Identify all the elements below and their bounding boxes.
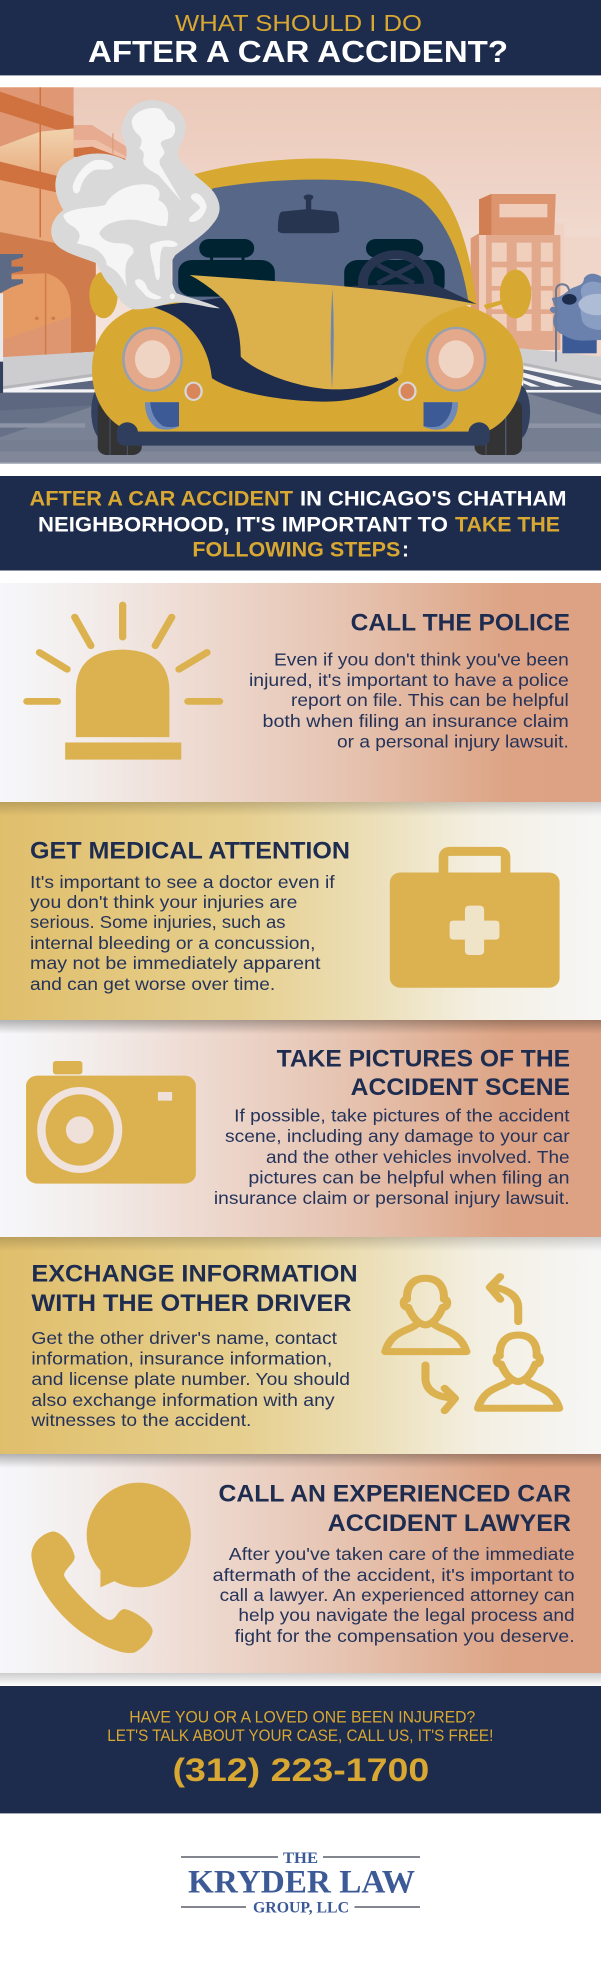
traffic light xyxy=(0,254,23,393)
body text: Get the other driver's name, contact xyxy=(31,1328,337,1348)
body text: help you navigate the legal process and xyxy=(238,1605,575,1625)
body text xyxy=(249,649,569,752)
intro banner: : xyxy=(402,538,409,561)
engine cavity xyxy=(151,297,399,402)
body text: scene, including any damage to your car xyxy=(225,1126,570,1146)
body text: internal bleeding or a concussion, xyxy=(30,933,315,953)
call to action footer: HAVE YOU OR A LOVED ONE BEEN INJURED? xyxy=(129,1707,475,1726)
icon: camera xyxy=(26,1061,196,1184)
body text: injured, it's important to have a police xyxy=(249,670,569,690)
headlights xyxy=(123,328,485,391)
body text: you don't think your injuries are xyxy=(30,892,297,912)
body text: call a lawyer. An experienced attorney can xyxy=(220,1585,575,1605)
icon: phone and speech bubble xyxy=(31,1483,191,1653)
heading: ACCIDENT LAWYER xyxy=(328,1510,571,1537)
body text: and can get worse over time. xyxy=(30,974,275,994)
body text: serious. Some injuries, such as xyxy=(30,912,286,932)
call to action footer xyxy=(0,1686,601,1814)
title banner xyxy=(0,0,601,76)
logo: the kryder law group xyxy=(181,1850,420,1917)
panel: take pictures of the accident scene xyxy=(0,1020,601,1237)
sidewalks and road xyxy=(0,348,601,464)
body text: After you've taken care of the immediate xyxy=(229,1544,575,1564)
seats xyxy=(178,239,445,297)
indicators xyxy=(186,383,415,400)
heading: CALL THE POLICE xyxy=(351,610,570,637)
mirrors xyxy=(89,270,531,318)
body text: If possible, take pictures of the accident xyxy=(234,1106,570,1126)
rear-view mirror xyxy=(278,194,339,233)
body text: or a personal injury lawsuit. xyxy=(337,732,569,752)
panel: call the police xyxy=(0,583,601,802)
body text xyxy=(213,1544,575,1646)
intro banner: FOLLOWING STEPS xyxy=(192,538,400,561)
icon: siren xyxy=(27,605,220,760)
logo: the kryder law group: KRYDER LAW xyxy=(188,1865,415,1901)
body text: Even if you don't think you've been xyxy=(274,649,569,669)
logo: the kryder law group: THE xyxy=(283,1850,318,1867)
heading: ACCIDENT SCENE xyxy=(351,1074,570,1101)
body text: may not be immediately apparent xyxy=(30,953,321,973)
body text: insurance claim or personal injury lawsuit. xyxy=(214,1188,570,1208)
body text: and license plate number. You should xyxy=(31,1369,350,1389)
body text: also exchange information with any xyxy=(31,1390,335,1410)
body text: and the other vehicles involved. The xyxy=(266,1147,570,1167)
panel: call an experienced car accident lawyer xyxy=(0,1454,601,1673)
heading xyxy=(218,1481,571,1537)
body text: witnesses to the accident. xyxy=(30,1410,251,1430)
heading: TAKE PICTURES OF THE xyxy=(277,1046,570,1073)
intro banner: IN CHICAGO'S CHATHAM xyxy=(300,488,566,511)
body text: fight for the compensation you deserve. xyxy=(235,1626,575,1646)
body text: report on file. This can be helpful xyxy=(291,690,569,710)
tree and lamp post xyxy=(550,274,601,362)
heading xyxy=(277,1046,570,1101)
open hood xyxy=(190,275,475,389)
right buildings xyxy=(471,194,601,360)
steering wheel xyxy=(363,255,429,312)
heading: GET MEDICAL ATTENTION xyxy=(30,838,350,865)
heading xyxy=(31,1261,358,1317)
body text: aftermath of the accident, it's important to xyxy=(213,1565,575,1585)
panel: get medical attention xyxy=(0,802,601,1020)
title banner: AFTER A CAR ACCIDENT? xyxy=(88,34,508,69)
body xyxy=(92,302,523,432)
left buildings xyxy=(0,87,126,357)
car xyxy=(89,158,531,455)
body text xyxy=(30,1328,350,1430)
intro banner: AFTER A CAR ACCIDENT xyxy=(30,488,293,511)
heading: CALL AN EXPERIENCED CAR xyxy=(218,1481,571,1508)
title banner: WHAT SHOULD I DO xyxy=(175,10,422,36)
intro banner: NEIGHBORHOOD, IT'S IMPORTANT TO xyxy=(38,513,448,536)
icon: first aid kit xyxy=(390,851,560,988)
fog lamps xyxy=(145,402,458,430)
icon: two people exchanging information xyxy=(385,1277,559,1411)
panel: exchange information with the other driver xyxy=(0,1237,601,1454)
body text: pictures can be helpful when filing an xyxy=(248,1167,570,1187)
body text xyxy=(214,1106,570,1208)
bumper xyxy=(117,422,490,446)
heading: EXCHANGE INFORMATION xyxy=(31,1261,358,1288)
rear wheels and tyres xyxy=(91,383,530,455)
smoke xyxy=(51,100,220,309)
sky xyxy=(0,87,601,371)
body text: It's important to see a doctor even if xyxy=(30,872,335,892)
call to action footer: (312) 223-1700 xyxy=(172,1752,429,1788)
body text xyxy=(30,872,335,994)
logo: the kryder law group: GROUP, LLC xyxy=(253,1900,349,1917)
illustration: crashed yellow car with smoke on a city street xyxy=(0,87,601,464)
body text: information, insurance information, xyxy=(31,1349,332,1369)
body text: both when filing an insurance claim xyxy=(262,711,569,731)
intro banner xyxy=(0,476,601,571)
roof and windshield xyxy=(184,158,476,305)
heading: WITH THE OTHER DRIVER xyxy=(31,1290,352,1317)
call to action footer: LET'S TALK ABOUT YOUR CASE, CALL US, IT'S FREE! xyxy=(107,1726,493,1745)
intro banner: TAKE THE xyxy=(455,513,560,536)
